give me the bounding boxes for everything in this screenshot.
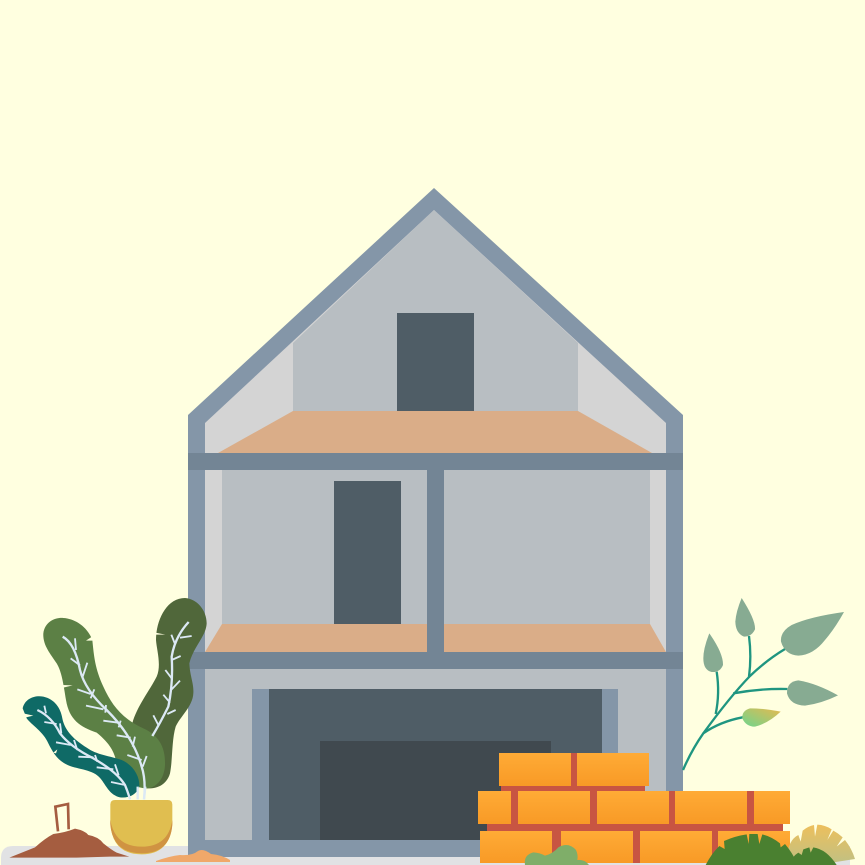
bottom row bricks: [480, 831, 790, 863]
interior post: [427, 470, 444, 652]
lower beam: [188, 652, 683, 669]
upper beam: [188, 453, 683, 470]
second floor side walls: [205, 470, 666, 652]
vine stems: [683, 636, 787, 770]
second floor planks: [205, 624, 666, 652]
middle row bricks: [478, 791, 790, 824]
attic floor: [218, 411, 652, 453]
bushes: [525, 825, 855, 865]
gradient bud leaf: [742, 708, 781, 727]
soil mound with spade: [9, 804, 129, 858]
brick wall: [478, 753, 790, 863]
ground floor wall: [205, 669, 666, 840]
interior door: [334, 481, 401, 624]
light green bush: [525, 845, 589, 865]
attic back wall: [293, 210, 578, 411]
back leaf: [132, 598, 207, 788]
attic window: [397, 313, 474, 411]
garage inner dark: [320, 741, 551, 840]
house frame: [188, 188, 683, 857]
notches on back leaf: [155, 633, 165, 635]
ground strip: [1, 846, 850, 865]
vine leaves: [703, 598, 844, 706]
dark green small bush: [790, 847, 837, 865]
mortar: [487, 753, 783, 863]
leaf veins: [37, 622, 192, 799]
attic side walls: [205, 210, 666, 453]
garage frame: [252, 689, 618, 840]
second floor back wall: [222, 470, 650, 624]
front teal leaf: [23, 696, 139, 798]
house: [188, 188, 683, 857]
pot shadow: [110, 820, 172, 853]
vine branch: [683, 598, 844, 770]
leaf edge notches: [23, 637, 93, 753]
dark green bush: [706, 834, 798, 865]
garage opening: [269, 689, 602, 840]
sand pile: [156, 850, 230, 862]
tan fan bush: [787, 825, 855, 865]
soil mound: [9, 829, 129, 858]
potted plant: [23, 598, 207, 854]
pot: [110, 800, 172, 854]
top row bricks: [499, 753, 649, 786]
middle leaf: [43, 618, 165, 788]
spade handle: [55, 804, 69, 831]
